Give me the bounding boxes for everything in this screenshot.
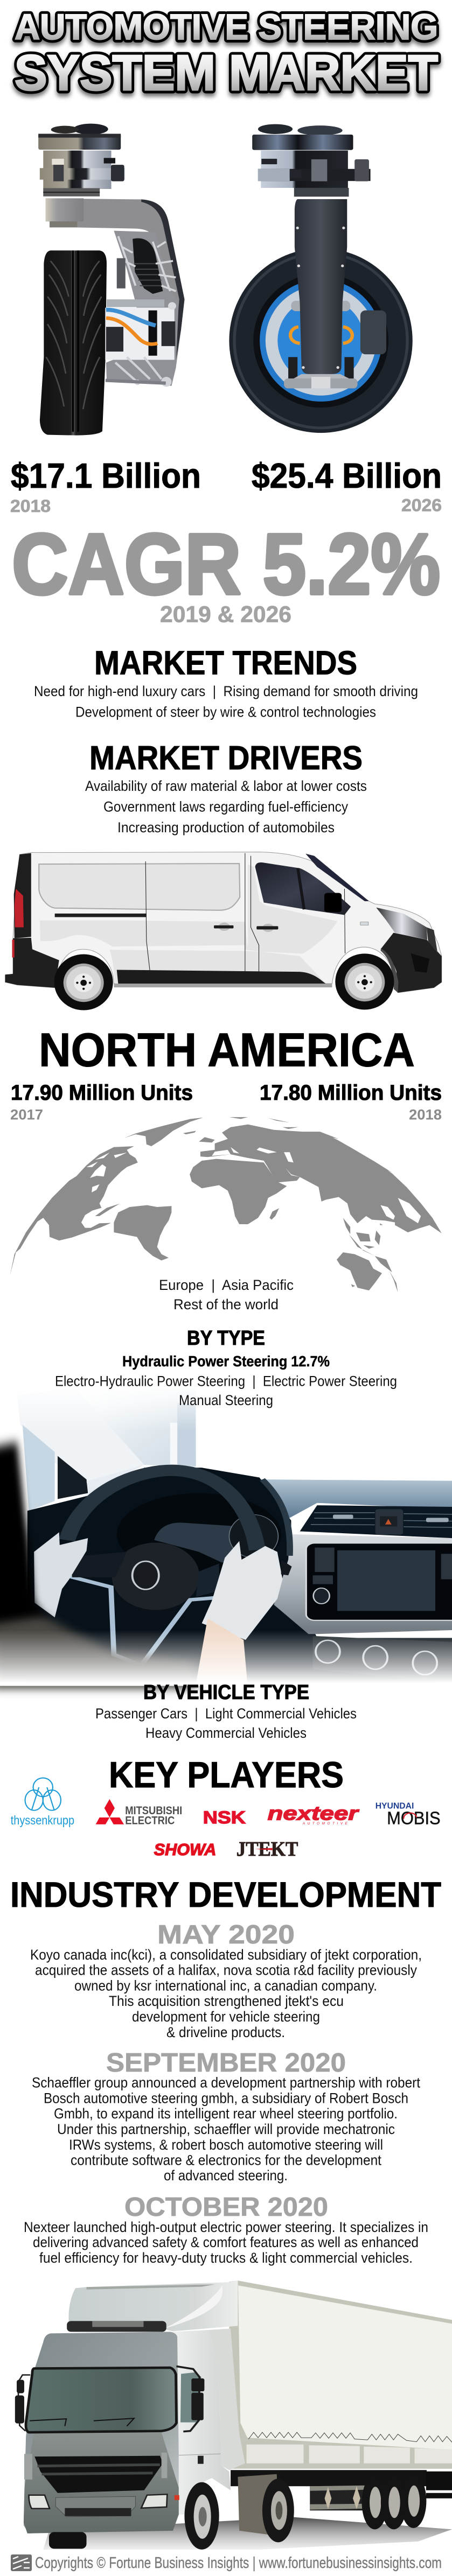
icon: fortune business insights logo xyxy=(11,2554,32,2571)
icon: steering assembly side view xyxy=(38,124,184,436)
title xyxy=(15,7,438,101)
world map xyxy=(10,1117,442,1292)
icon: van xyxy=(5,852,442,1010)
map: south america xyxy=(114,1205,171,1260)
truck: headlights and bumper xyxy=(29,2494,179,2549)
photo: steering wheel hub xyxy=(69,1543,219,1665)
logo: hyundai mobis xyxy=(375,1802,441,1828)
logo: mitsubishi electric: MITSUBISHI xyxy=(125,1803,182,1817)
photo: window and pillar xyxy=(17,1384,196,1511)
photo: forearm xyxy=(196,1618,247,1683)
photo: left gloved hand xyxy=(34,1532,88,1617)
logo: nexteer: AUTOMOTIVE xyxy=(302,1822,348,1826)
text: by type list: Hydraulic Power Steering 12.7% xyxy=(122,1353,330,1370)
section: market drivers: MARKET DRIVERS xyxy=(89,740,363,777)
icon: upper mount xyxy=(38,124,124,196)
map: greenland xyxy=(124,1118,203,1146)
logo: thyssenkrupp xyxy=(11,1778,74,1828)
map: madagascar xyxy=(269,1208,279,1220)
development: september 2020: of advanced steering. xyxy=(164,2167,288,2184)
stat: 2026 market value: 2026 xyxy=(401,495,442,515)
icon: steering assembly wheel view xyxy=(229,124,413,433)
photo: bottom fade xyxy=(0,1630,452,1686)
truck: air deflector xyxy=(68,2280,238,2331)
stat: 2018 units: 17.80 Million Units xyxy=(260,1081,442,1105)
truck: cab front xyxy=(24,2332,179,2533)
text: regions: Europe | Asia Pacific xyxy=(159,1277,294,1293)
development: september 2020 xyxy=(32,2048,421,2184)
photo: top fade xyxy=(0,1384,202,1430)
section: market trends: Development of steer by wire & control technologies xyxy=(75,704,376,720)
logo: thyssenkrupp: thyssenkrupp xyxy=(11,1813,74,1828)
text: by type list xyxy=(55,1353,397,1408)
icon: lattice and shock xyxy=(105,231,179,387)
truck: front wheel xyxy=(184,2482,219,2550)
photo: dashboard top xyxy=(196,1466,452,1519)
section: market drivers: Availability of raw material & labor at lower costs xyxy=(85,778,367,794)
section: market trends: Need for high-end luxury cars | Rising demand for smooth driving xyxy=(34,683,418,699)
logo: nsk: NSK xyxy=(203,1808,246,1828)
map: australia xyxy=(337,1252,398,1292)
stat: 2018 units: 2018 xyxy=(409,1107,442,1123)
truck: lower front xyxy=(24,2432,179,2533)
map: inland seas xyxy=(212,1147,421,1223)
map: africa xyxy=(190,1159,287,1224)
icon: front wheel xyxy=(335,953,394,1010)
section: by vehicle type xyxy=(95,1681,357,1741)
map: small northern islands xyxy=(183,1117,392,1173)
logo: jtekt: JTEKT xyxy=(237,1838,298,1861)
photo: car dashboard with gloved hands on the steering wheel xyxy=(0,1384,452,1689)
development: may 2020: This acquisition strengthened jtekt's ecu xyxy=(109,1993,344,2009)
map: south-east asia islands xyxy=(343,1218,392,1272)
development: october 2020 xyxy=(24,2193,428,2266)
truck: ground shadow xyxy=(43,2517,452,2550)
development: september 2020: Under this partnership, schaeffler will provide mechatronic xyxy=(57,2121,395,2137)
map: eurasia xyxy=(200,1125,442,1233)
photo: air vents xyxy=(300,1505,452,1538)
logo: mitsubishi electric xyxy=(96,1799,182,1827)
truck: cab side xyxy=(173,2330,231,2515)
text: regions xyxy=(159,1277,294,1312)
icon: tire side view xyxy=(40,250,107,436)
truck: grille xyxy=(24,2453,167,2493)
stat: 2018 market value: 2018 xyxy=(10,496,51,516)
development: september 2020: Bosch automotive steering gmbh, a subsidiary of Robert Bosch xyxy=(44,2090,408,2106)
section: by vehicle type: Heavy Commercial Vehicles xyxy=(145,1725,307,1741)
development: september 2020: contribute software & electronics for the development xyxy=(71,2152,382,2168)
development: may 2020: acquired the assets of a halifax, nova scotia r&d facility previously xyxy=(35,1962,418,1978)
title: AUTOMOTIVE STEERING xyxy=(15,7,438,47)
development: may 2020: owned by ksr international inc, a canadian company. xyxy=(74,1978,377,1994)
stat: 2026 market value: $25.4 Billion xyxy=(252,456,442,495)
truck: fuel tank xyxy=(238,2474,280,2536)
icon: upper mount xyxy=(252,124,371,196)
section: by vehicle type: BY VEHICLE TYPE xyxy=(143,1681,309,1704)
stat: 2018 units xyxy=(260,1081,442,1123)
title: SYSTEM MARKET xyxy=(15,45,438,101)
map: north america xyxy=(10,1146,138,1275)
truck: mirrors and side window xyxy=(15,2366,220,2464)
photo: infotainment screen xyxy=(306,1543,452,1620)
section: market trends xyxy=(34,645,418,720)
development: september 2020: Schaeffler group announced a development partnership with robert xyxy=(32,2075,421,2091)
development: may 2020: MAY 2020 xyxy=(157,1920,295,1949)
section: by vehicle type: Passenger Cars | Light Commercial Vehicles xyxy=(95,1705,357,1722)
development: september 2020: IRWs systems, & robert bosch automotive steering will xyxy=(69,2137,383,2153)
photo: lower control knobs xyxy=(313,1636,452,1683)
map: central america islands xyxy=(95,1204,120,1216)
icon: curved arm xyxy=(46,198,184,371)
truck: windshield xyxy=(26,2368,176,2432)
map: north america details xyxy=(87,1153,127,1192)
photo: silver dash panel xyxy=(274,1534,452,1634)
development: may 2020: development for vehicle steering xyxy=(132,2009,320,2025)
stat: 2026 market value xyxy=(252,456,442,515)
truck: rear wheels xyxy=(362,2474,426,2529)
section: market drivers xyxy=(85,740,367,836)
truck: chassis xyxy=(231,2470,452,2510)
section: by type heading: BY TYPE xyxy=(187,1327,265,1350)
photo: right gloved hand xyxy=(202,1541,282,1640)
logos: key players xyxy=(11,1778,441,1861)
stat: 2018 market value: $17.1 Billion xyxy=(11,456,201,495)
icon: truck xyxy=(15,2280,452,2550)
development: october 2020: fuel efficiency for heavy-duty trucks & light commercial vehicles. xyxy=(39,2250,413,2266)
title: SYSTEM MARKET xyxy=(15,45,438,101)
stat: 2017 units: 2017 xyxy=(10,1107,43,1123)
heading: north america: NORTH AMERICA xyxy=(39,1023,415,1077)
stat: 2017 units xyxy=(10,1081,193,1123)
stat: 2017 units: 17.90 Million Units xyxy=(11,1081,193,1105)
logo: hyundai mobis: MOBIS xyxy=(387,1808,441,1828)
icon: carbon arm xyxy=(284,199,358,388)
photo: left dark edge xyxy=(0,1442,49,1642)
logo: showa: SHOWA xyxy=(154,1841,216,1859)
section: market trends: MARKET TRENDS xyxy=(94,645,357,682)
logo: mitsubishi electric: ELECTRIC xyxy=(125,1814,175,1827)
development: september 2020: SEPTEMBER 2020 xyxy=(106,2048,346,2077)
photo: sleeve xyxy=(0,1617,196,1689)
heading: key players: KEY PLAYERS xyxy=(109,1754,344,1795)
development: october 2020: delivering advanced safety & comfort features as well as enhanced xyxy=(33,2234,419,2250)
section: market drivers: Increasing production of automobiles xyxy=(117,819,335,836)
title: AUTOMOTIVE STEERING xyxy=(15,7,438,47)
development: october 2020: Nexteer launched high-output electric power steering. It specializes in xyxy=(24,2219,428,2235)
photo: instrument cluster xyxy=(117,1479,290,1575)
development: october 2020: OCTOBER 2020 xyxy=(124,2193,328,2222)
stat: 2018 market value xyxy=(10,456,201,516)
text: by type list: Manual Steering xyxy=(179,1392,273,1408)
text: by type list: Electro-Hydraulic Power Steering | Electric Power Steering xyxy=(55,1373,397,1389)
truck: drive wheel xyxy=(262,2479,294,2542)
icon: wheel xyxy=(229,248,413,433)
development: may 2020 xyxy=(30,1920,422,2040)
photo: dark cabin base xyxy=(27,1468,452,1683)
text: regions: Rest of the world xyxy=(173,1296,279,1312)
photo: steering wheel rim xyxy=(67,1470,257,1550)
development: september 2020: Gmbh, to expand its intelligent rear wheel steering portfolio. xyxy=(54,2105,398,2122)
section: market drivers: Government laws regarding fuel-efficiency xyxy=(103,799,349,815)
development: may 2020: Koyo canada inc(kci), a consolidated subsidiary of jtekt corporation, xyxy=(30,1947,422,1963)
logo: hyundai mobis: HYUNDAI xyxy=(375,1802,414,1811)
logo: nexteer: nexteer xyxy=(268,1802,359,1824)
icon: blue and orange cables xyxy=(106,310,157,344)
icon: rear wheel xyxy=(54,954,113,1010)
development: may 2020: & driveline products. xyxy=(166,2024,285,2040)
stat: CAGR: 2019 & 2026 xyxy=(160,602,291,628)
truck: trailer box xyxy=(229,2280,452,2469)
